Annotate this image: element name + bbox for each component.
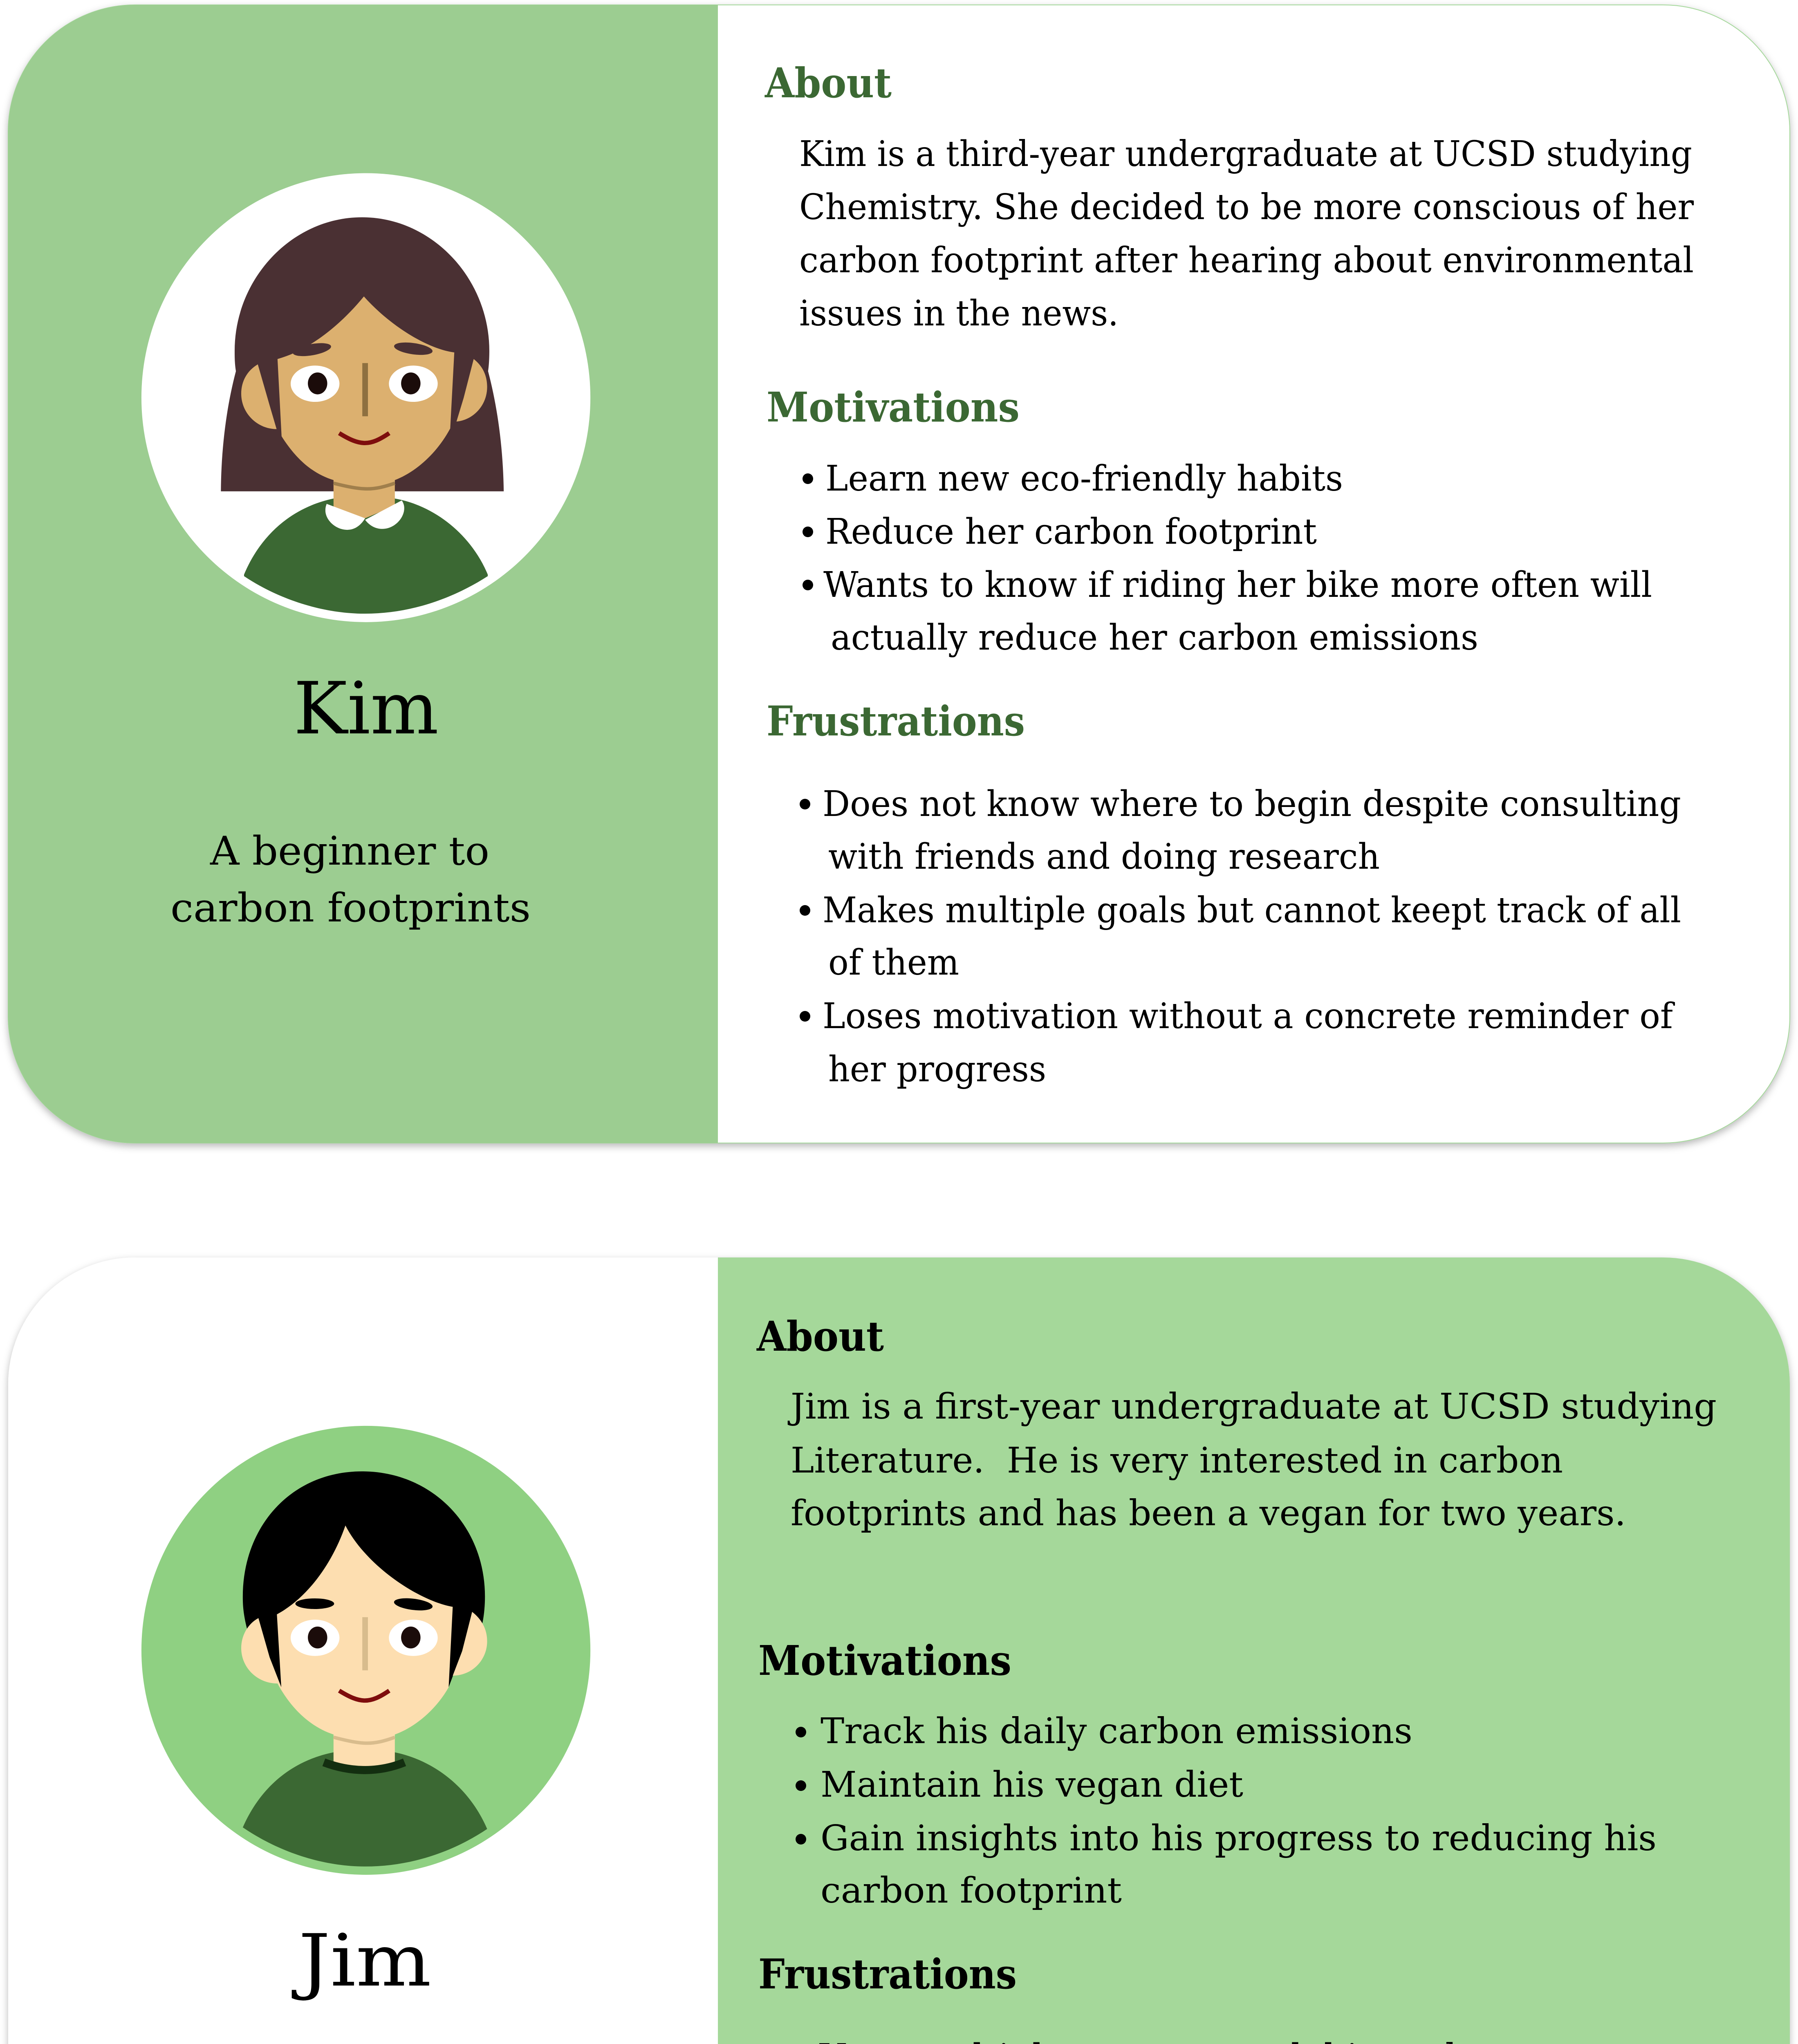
list: Frustrations: with friends and doing research xyxy=(828,836,1380,877)
face xyxy=(278,296,454,486)
text: About body: footprints and has been a vegan for two years. xyxy=(791,1493,1626,1534)
heading: About: About xyxy=(756,1312,884,1360)
nose xyxy=(362,1617,368,1670)
avatar: Jim xyxy=(141,1426,590,1875)
card background xyxy=(8,1257,1790,2044)
hair xyxy=(243,1471,485,1687)
list: Motivations: actually reduce her carbon emissions xyxy=(831,617,1478,658)
list: Motivations: Learn new eco-friendly habits xyxy=(825,458,1343,499)
heading: Frustrations: Frustrations xyxy=(767,697,1025,745)
shirt xyxy=(243,1752,487,1867)
eyebrows xyxy=(295,1596,433,1612)
ears xyxy=(241,359,487,429)
heading: Motivations: Motivations xyxy=(758,1636,1011,1685)
list: Motivations xyxy=(796,1711,1657,1911)
panel: Kim persona card xyxy=(8,5,1790,1143)
list: Frustrations xyxy=(800,784,1681,1090)
neck shadow xyxy=(334,483,395,489)
neck xyxy=(334,1732,395,1767)
nose xyxy=(362,363,368,416)
text: Kim description: A beginner to xyxy=(210,828,489,874)
shirt xyxy=(244,499,488,614)
text: About body xyxy=(799,134,1694,334)
avatar circle xyxy=(141,1426,590,1875)
avatar: Kim xyxy=(141,173,590,622)
list: Frustrations: of them xyxy=(828,942,959,983)
eyes xyxy=(291,1620,438,1656)
text: Kim description: carbon footprints xyxy=(170,885,531,931)
heading: Frustrations: Frustrations xyxy=(758,1950,1017,1998)
text: About body: issues in the news. xyxy=(799,293,1119,334)
heading: About: About xyxy=(764,59,892,107)
avatar circle xyxy=(141,173,590,622)
text: About body xyxy=(787,1386,1717,1534)
list: Frustrations: Makes multiple goals but cannot keept track of all xyxy=(823,890,1681,931)
mouth xyxy=(339,433,389,443)
mouth xyxy=(339,1691,389,1701)
face xyxy=(277,1526,453,1740)
eyebrows xyxy=(292,341,433,359)
text: Kim description xyxy=(170,828,531,931)
list: Frustrations: Loses motivation without a concrete reminder of xyxy=(823,996,1675,1037)
heading: Motivations: Motivations xyxy=(767,383,1020,431)
text: About body: Literature. He is very interested in carbon xyxy=(791,1440,1563,1481)
text: About body: Chemistry. She decided to be more conscious of her xyxy=(799,187,1694,228)
text: About body: Kim is a third-year undergraduate at UCSD studying xyxy=(799,134,1692,175)
list: Motivations: Wants to know if riding her bike more often will xyxy=(823,565,1652,605)
shirt collar xyxy=(324,1762,405,1770)
card background xyxy=(8,5,1790,1143)
list: Motivations xyxy=(803,458,1652,658)
panel: Jim persona card xyxy=(8,1257,1790,2044)
list: Motivations: Track his daily carbon emissions xyxy=(821,1711,1412,1752)
list: Motivations: Maintain his vegan diet xyxy=(821,1764,1243,1805)
hair xyxy=(221,217,504,491)
eyes xyxy=(291,365,438,402)
heading: name Jim: Jim xyxy=(291,1919,431,2003)
neck xyxy=(334,477,395,518)
text: About body: carbon footprint after hearing about environmental xyxy=(799,240,1694,281)
neck shadow xyxy=(334,1737,395,1743)
list: Motivations: carbon footprint xyxy=(821,1870,1122,1911)
list: Motivations: Reduce her carbon footprint xyxy=(825,511,1317,552)
heading: name Kim: Kim xyxy=(294,667,439,751)
collar xyxy=(325,500,404,530)
list: Frustrations: her progress xyxy=(828,1049,1046,1090)
list: Frustrations: Does not know where to begin despite consulting xyxy=(823,784,1681,825)
ears xyxy=(241,1612,487,1687)
list: Motivations: Gain insights into his progress to reducing his xyxy=(821,1818,1657,1859)
text: About body: Jim is a first-year undergraduate at UCSD studying xyxy=(787,1386,1717,1427)
